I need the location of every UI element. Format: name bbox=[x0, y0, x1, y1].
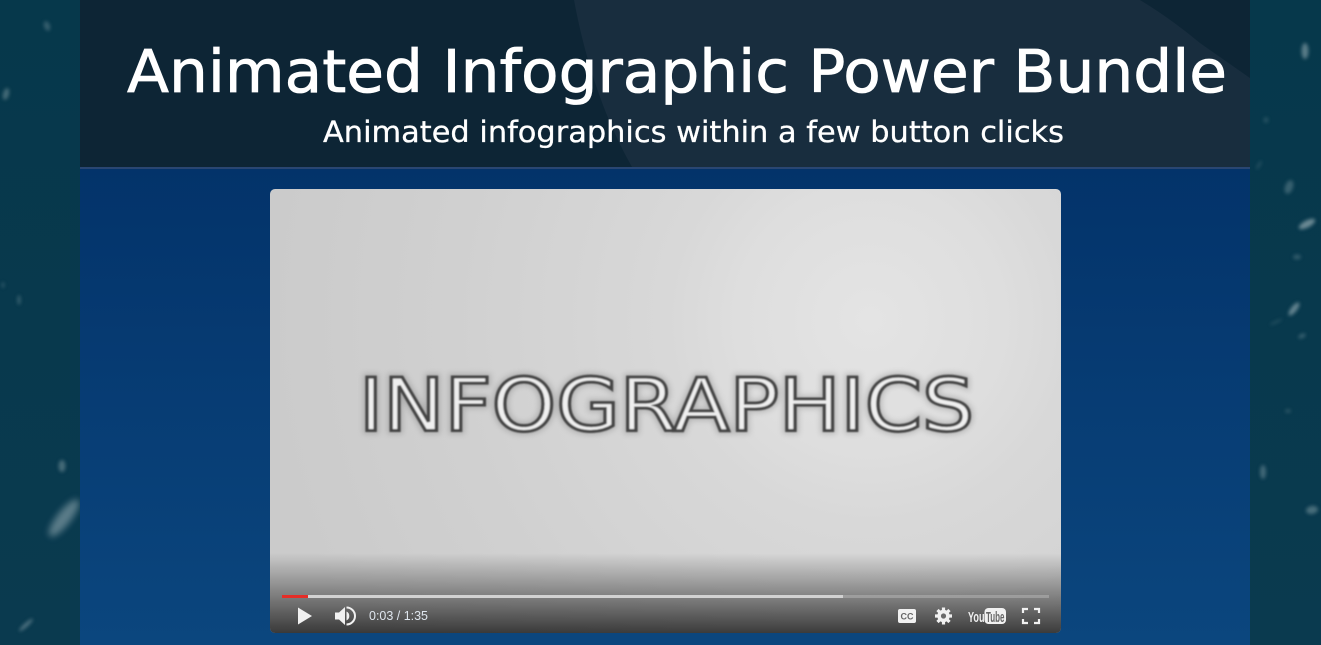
progress bar bbox=[282, 595, 1049, 598]
video frame bbox=[270, 189, 1061, 633]
main blue content panel bbox=[80, 167, 1250, 645]
icon: settings gear bbox=[935, 608, 952, 624]
video player bbox=[270, 189, 1061, 633]
icon: YouTube logo: You bbox=[968, 609, 984, 626]
icon: closed captions bbox=[898, 609, 916, 623]
video headline: INFOGRAPHICS: INFOGRAPHICS bbox=[359, 364, 974, 448]
icon: volume bbox=[335, 607, 355, 625]
icon: fullscreen bbox=[1023, 609, 1039, 623]
icon: closed captions: CC bbox=[900, 612, 914, 622]
control bar gradient bbox=[270, 553, 1061, 633]
icon: YouTube logo bbox=[968, 608, 1006, 624]
header band bbox=[80, 0, 1250, 169]
title: Animated Infographic Power Bundle bbox=[127, 37, 1227, 106]
icon: YouTube logo: Tube bbox=[986, 609, 1004, 626]
icon: play bbox=[298, 608, 312, 624]
time display: 0:03 / 1:35 bbox=[369, 609, 428, 623]
video headline: INFOGRAPHICS: INFOGRAPHICS bbox=[359, 364, 974, 448]
subtitle: Animated infographics within a few button clicks bbox=[323, 115, 1064, 149]
